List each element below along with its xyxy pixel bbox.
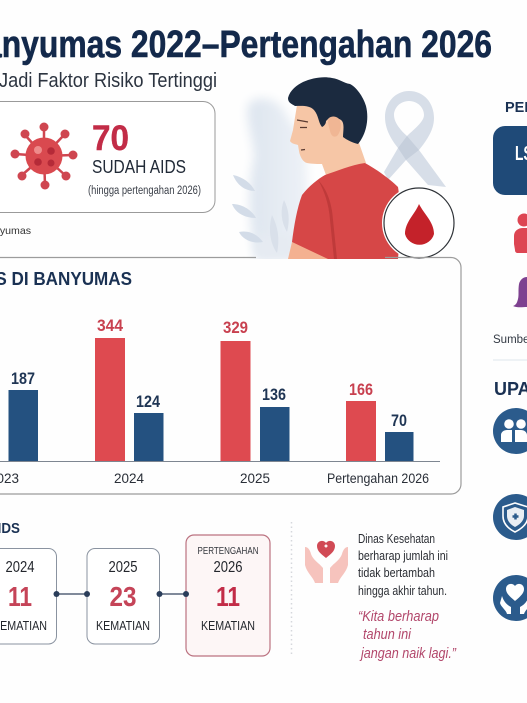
shirt <box>292 163 400 259</box>
ear <box>328 117 341 137</box>
card: 2024 <box>0 548 56 644</box>
facial features <box>297 120 308 150</box>
awareness ribbon <box>384 91 446 187</box>
bar chart: 70 <box>391 411 407 430</box>
card: mid 2026: 11 <box>216 581 240 612</box>
card: mid 2026 <box>186 535 270 656</box>
bar chart: Pertengahan 2026 <box>327 470 429 486</box>
blood drop badge <box>382 186 456 260</box>
icon: people <box>493 408 527 454</box>
panel: AIDS count card <box>0 102 215 212</box>
quote: jangan naik lagi.” <box>359 646 457 662</box>
icon: red person <box>514 214 527 253</box>
quote: tahun ini <box>363 627 412 643</box>
bar chart: 329 <box>223 318 248 337</box>
background figure <box>232 98 310 259</box>
text: health office note: berharap jumlah ini <box>358 549 448 563</box>
section: deaths timeline <box>0 521 270 656</box>
bar chart: 2025 <box>240 470 270 486</box>
face and neck <box>290 105 366 175</box>
stat number: 70 <box>92 119 129 158</box>
connectors <box>56 593 186 595</box>
quote: “Kita berharap <box>358 609 439 625</box>
text: health office note: tidak bertambah <box>358 566 435 580</box>
bar chart: 136 <box>262 385 286 404</box>
text: health office note: hingga akhir tahun. <box>358 584 447 598</box>
card: 2024: 11 <box>8 581 32 612</box>
card: mid 2026: 2026 <box>214 559 242 576</box>
stat note: (hingga pertengahan 2026) <box>88 185 201 197</box>
card: LSL <box>493 126 527 195</box>
card: 2024: 2024 <box>6 559 35 576</box>
text: health office note: Dinas Kesehatan <box>358 532 435 546</box>
right column: risk groups <box>493 100 527 621</box>
bar chart: 2024 <box>114 470 144 486</box>
bar chart: 124 <box>136 392 160 411</box>
bar chart: 187 <box>11 369 35 388</box>
card: 2025: 2025 <box>108 559 138 576</box>
quote <box>358 609 457 662</box>
text: health office note <box>358 532 448 598</box>
arm <box>288 242 330 259</box>
card: mid 2026: KEMATIAN <box>201 618 255 633</box>
subtitle: Jadi Faktor Risiko Tertinggi <box>0 70 217 92</box>
icon: hands holding heart <box>305 541 348 583</box>
bar chart: 344 <box>97 316 123 335</box>
illustration: man with ribbon and blood drop <box>232 77 456 260</box>
icon: virus <box>10 122 78 190</box>
stat label: SUDAH AIDS <box>92 157 186 177</box>
card: 2025: KEMATIAN <box>96 618 150 633</box>
connector dots <box>54 591 189 597</box>
card: mid 2026: PERTENGAHAN <box>198 545 258 557</box>
bar chart <box>0 316 440 486</box>
hair <box>288 77 367 144</box>
bar chart: 166 <box>349 380 373 399</box>
panel: case chart <box>0 258 461 494</box>
card: 2025: 23 <box>110 581 136 612</box>
icon: purple person <box>513 277 527 307</box>
card: 2025 <box>87 548 160 644</box>
icon: hands with heart <box>493 575 527 621</box>
icon: shield <box>493 494 527 540</box>
icon: blood drop <box>405 204 434 245</box>
